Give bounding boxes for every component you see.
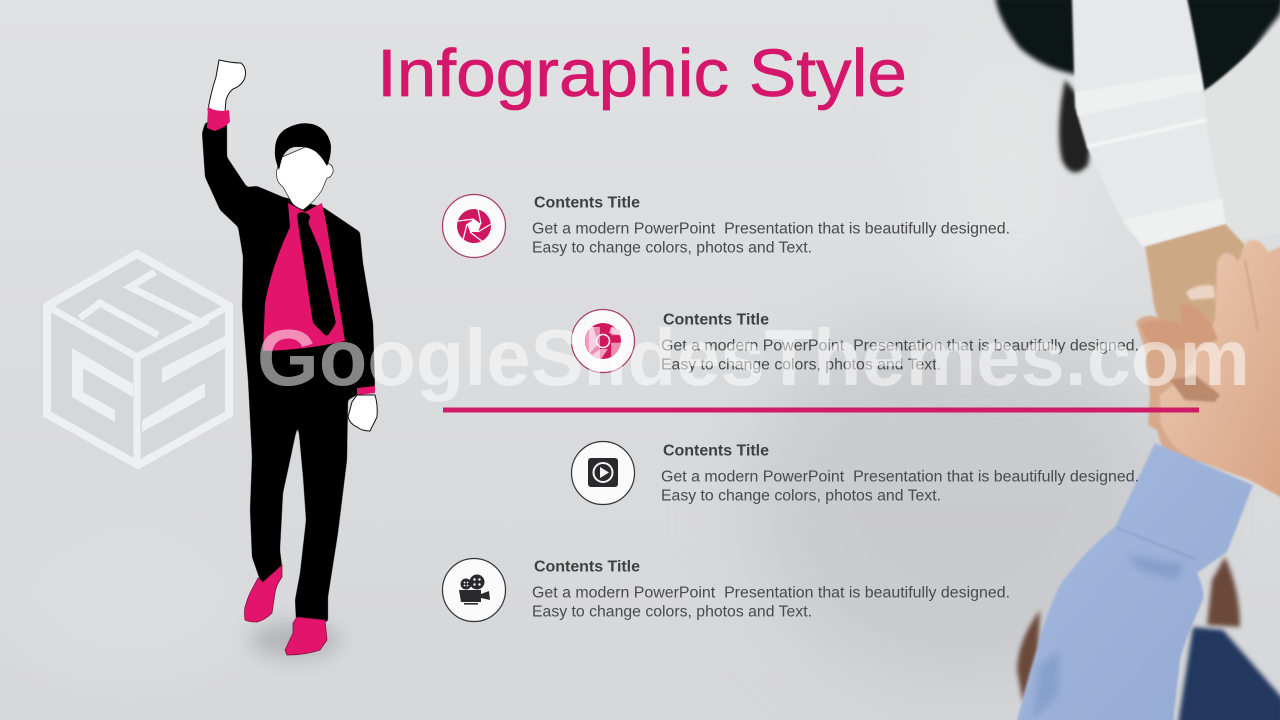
interlocked fingers [1140, 285, 1220, 402]
cube body [47, 254, 229, 465]
right face letter [142, 335, 227, 432]
text 2: Get a modern PowerPoint Presentation that is beautifully designed. [661, 338, 1139, 354]
text 2: Easy to change colors, photos and Text. [661, 356, 941, 374]
icon: chrome wheel [585, 323, 621, 359]
lower hand [348, 395, 377, 431]
text 2 [661, 338, 1139, 374]
divider line [443, 408, 1199, 412]
heading 3: Contents Title [663, 442, 769, 460]
lower cuff [357, 386, 375, 395]
tie [297, 212, 336, 337]
text 4 [532, 584, 1010, 620]
left face letter [72, 348, 133, 422]
text 4: Get a modern PowerPoint Presentation that is beautifully designed. [532, 584, 1010, 602]
fist [208, 60, 246, 112]
item 4: movie camera [442, 558, 1010, 622]
main white sleeve [1072, 0, 1226, 247]
heading 2: Contents Title [663, 312, 769, 328]
icon circle 1 [442, 194, 506, 258]
heading 4: Contents Title [534, 558, 640, 576]
hair [275, 123, 331, 170]
logo: isometric cube mark [47, 254, 229, 465]
finger crease [1245, 260, 1258, 330]
heading 1: Contents Title [534, 194, 640, 212]
ground shadow [250, 622, 340, 658]
icon circle 2 [572, 310, 634, 372]
jacket and trousers [202, 115, 375, 622]
shirt [263, 203, 345, 351]
watermark text: GoogleSlidesThemes.com [257, 313, 1250, 402]
text 1: Get a modern PowerPoint Presentation that is beautifully designed. [532, 220, 1010, 238]
icon: play button [588, 458, 618, 487]
blue sleeve [1016, 443, 1253, 720]
cuff raised [207, 107, 230, 131]
icon: aperture [457, 209, 491, 243]
text 1 [532, 220, 1010, 256]
text 3: Get a modern PowerPoint Presentation that is beautifully designed. [661, 468, 1139, 486]
blurred shoe [1059, 80, 1090, 172]
text 3 [661, 468, 1139, 504]
item 1: aperture [442, 194, 1010, 258]
photo: stacked hands [995, 0, 1280, 720]
icon circle 3 [572, 442, 634, 504]
right white sleeve [1203, 18, 1280, 240]
text 1: Easy to change colors, photos and Text. [532, 240, 812, 256]
dark clothing top [995, 0, 1280, 93]
right shoe [285, 617, 327, 655]
item 2: browser [572, 310, 1139, 374]
main skin hand [1160, 240, 1280, 499]
person silhouette [202, 60, 377, 658]
title: Infographic Style [377, 36, 907, 111]
item 3: play [572, 442, 1139, 504]
cube edges and top letter [47, 272, 229, 465]
text 3: Easy to change colors, photos and Text. [661, 488, 941, 504]
left shoe [244, 565, 282, 622]
brown shoes [1017, 557, 1240, 703]
lower hand fingers left [1136, 316, 1215, 470]
forearm [1145, 224, 1245, 335]
icon circle 4 [442, 558, 506, 622]
navy trousers [1178, 627, 1280, 720]
face [276, 145, 333, 210]
text 4: Easy to change colors, photos and Text. [532, 604, 812, 620]
icon: film camera [459, 574, 490, 605]
